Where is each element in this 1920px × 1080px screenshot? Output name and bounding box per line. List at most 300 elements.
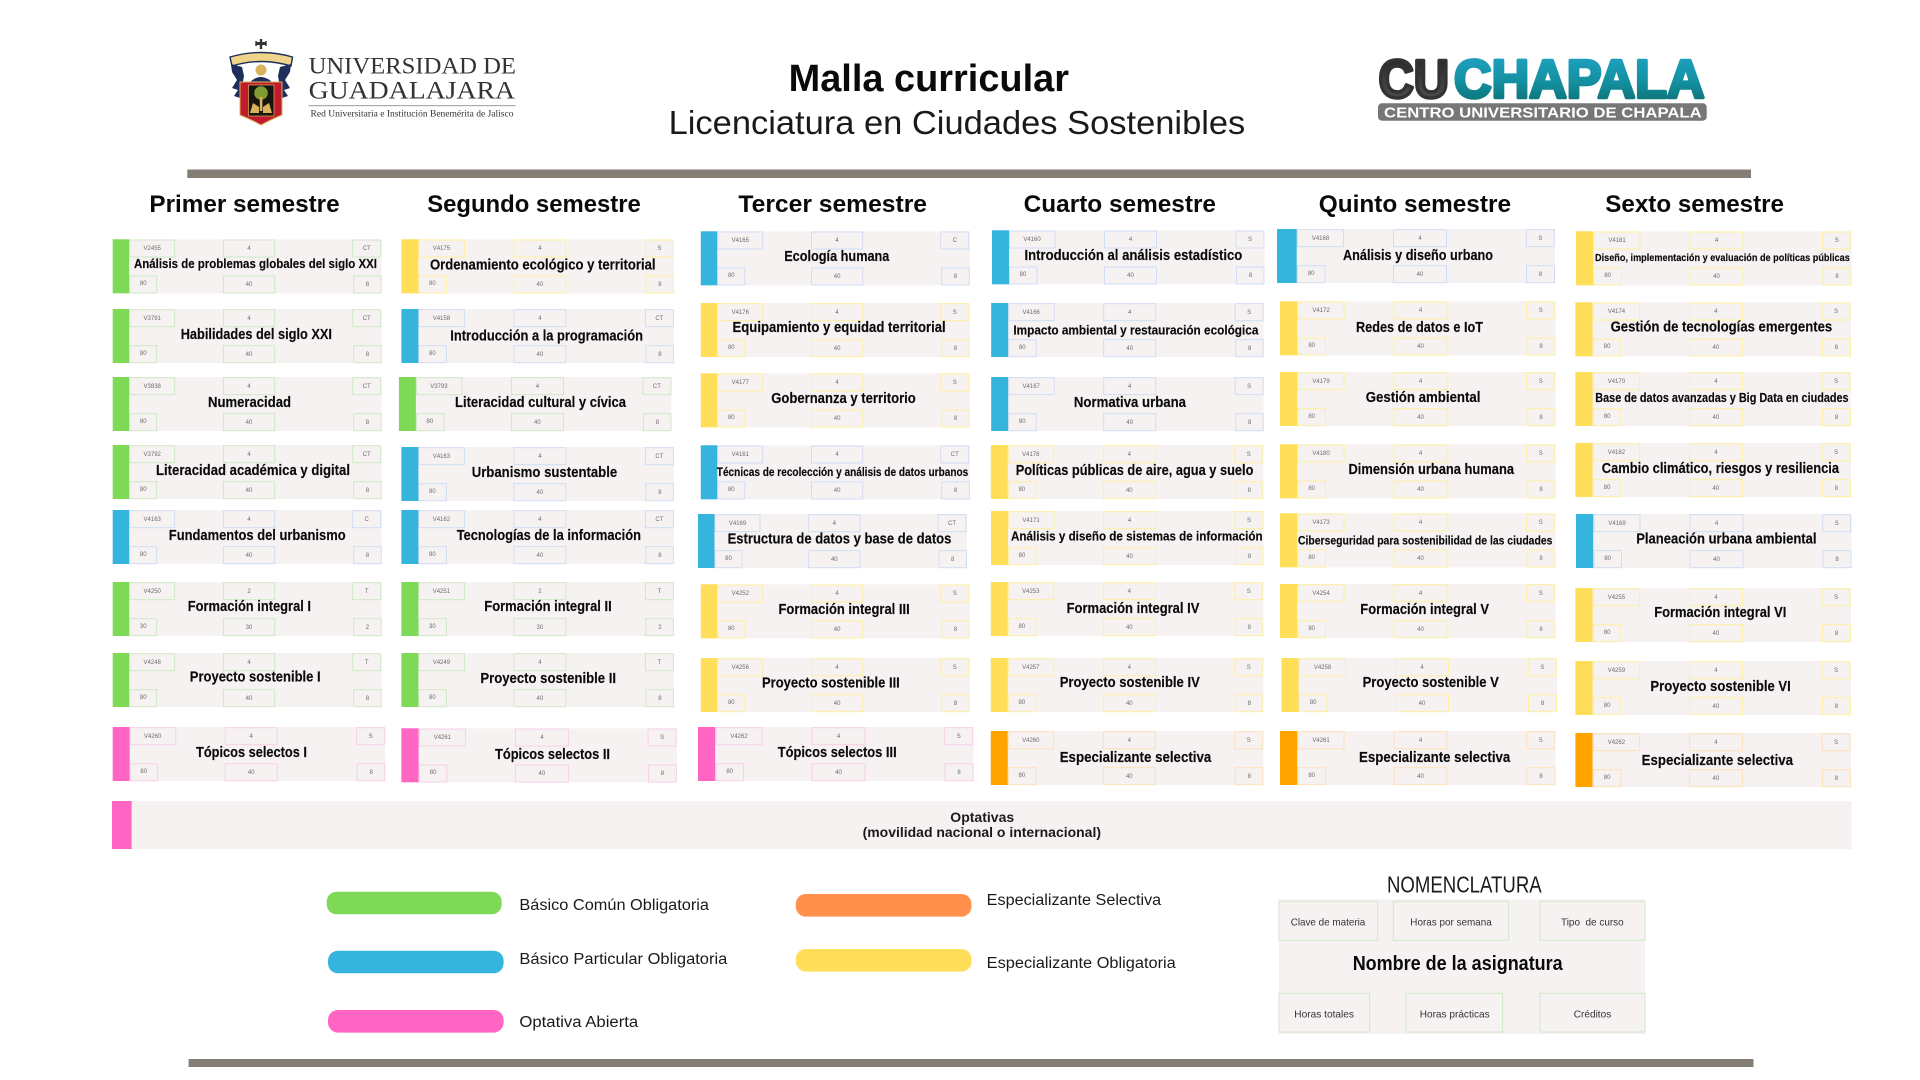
card: Numeracidad: [113, 377, 382, 431]
card: Ciberseguridad para sostenibilidad de las ciudades: 4: [1419, 520, 1423, 526]
card: Tópicos selectos I: 8: [370, 770, 374, 776]
panel: Cuarto semestre courses: [991, 230, 1264, 785]
card: Numeracidad: 40: [246, 420, 253, 426]
card: Formación integral II: 30: [429, 624, 436, 630]
card: Tópicos selectos III: [698, 727, 974, 781]
card: Políticas públicas de aire, agua y suelo: 4: [1128, 452, 1132, 458]
panel: Tercer semestre courses: [698, 231, 974, 781]
card: Técnicas de recolección y análisis de datos urbanos: V4161: [732, 452, 750, 458]
card: Proyecto sostenible I: 40: [246, 696, 253, 702]
card: Proyecto sostenible I: 4: [247, 660, 251, 666]
card: Literacidad cultural y cívica: CT: [653, 384, 661, 390]
card: Habilidades del siglo XXI: [113, 309, 382, 363]
icon: university coat of arms: [230, 39, 292, 125]
card: Fundamentos del urbanismo: 80: [140, 552, 147, 558]
card: Diseño, implementación y evaluación de políticas públicas: Diseño, implementación y evaluación de políticas públicas: [1595, 252, 1850, 264]
card: Numeracidad: 4: [247, 384, 251, 390]
card: Proyecto sostenible II: 8: [658, 696, 662, 702]
card: Diseño, implementación y evaluación de políticas públicas: 80: [1604, 273, 1612, 279]
card: Tópicos selectos I: 4: [250, 734, 254, 740]
panel: nomenclature key: Horas por semana: [1410, 916, 1492, 928]
card: Proyecto sostenible II: 40: [537, 696, 544, 702]
card: Estructura de datos y base de datos: 4: [833, 521, 837, 527]
card: Proyecto sostenible VI: S: [1834, 668, 1838, 674]
card: Tecnologías de la información: [401, 510, 674, 564]
card: Tópicos selectos II: 40: [539, 771, 546, 777]
panel: Quinto semestre courses: [1277, 229, 1557, 785]
card: Tópicos selectos II: [401, 728, 677, 782]
card: Políticas públicas de aire, agua y suelo: Políticas públicas de aire, agua y suelo: [1016, 463, 1254, 479]
card: Proyecto sostenible II: Proyecto sostenible II: [480, 671, 616, 687]
card: Formación integral I: 30: [246, 625, 253, 631]
card: Dimensión urbana humana: 80: [1308, 486, 1316, 492]
card: Formación integral II: Formación integral II: [484, 599, 612, 615]
panel: nomenclature key: Tipo de curso: [1561, 916, 1624, 928]
card: Habilidades del siglo XXI: 8: [366, 352, 370, 358]
card: Formación integral I: Formación integral I: [188, 599, 311, 615]
card: Proyecto sostenible IV: S: [1247, 665, 1251, 671]
card: Gestión de tecnologías emergentes: 8: [1835, 345, 1839, 351]
card: Urbanismo sustentable: 4: [538, 454, 542, 460]
card: Formación integral II: [401, 582, 674, 636]
card: Normativa urbana: 8: [1248, 420, 1252, 426]
card: Redes de datos e IoT: 40: [1417, 344, 1424, 350]
card: Formación integral I: 30: [140, 624, 147, 630]
card: Tecnologías de la información: Tecnologías de la información: [457, 528, 641, 544]
card: Urbanismo sustentable: 80: [429, 489, 436, 495]
card: Cambio climático, riesgos y resiliencia: 80: [1604, 485, 1611, 491]
card: Redes de datos e IoT: 4: [1419, 308, 1423, 314]
card: Gobernanza y territorio: 80: [728, 415, 735, 421]
card: Literacidad académica y digital: [113, 445, 382, 499]
panel: Segundo semestre courses: [399, 239, 677, 782]
card: Formación integral V: 40: [1417, 627, 1424, 633]
legend item: Especializante Selectiva: [796, 892, 1162, 917]
card: Proyecto sostenible II: [401, 653, 674, 707]
card: Tópicos selectos III: 4: [837, 734, 841, 740]
card: Introducción a la programación: 40: [537, 352, 544, 358]
card: Análisis y diseño de sistemas de información: 4: [1128, 518, 1132, 524]
card: Impacto ambiental y restauración ecológica: V4166: [1023, 310, 1041, 316]
card: Redes de datos e IoT: Redes de datos e IoT: [1356, 320, 1483, 336]
card: Gestión de tecnologías emergentes: V4174: [1608, 309, 1626, 315]
card: Proyecto sostenible I: T: [365, 660, 369, 666]
card: Especializante selectiva: [1280, 731, 1556, 785]
card: Tópicos selectos III: 8: [957, 770, 961, 776]
card: Especializante selectiva: S: [1539, 738, 1543, 744]
card: Base de datos avanzadas y Big Data en ciudades: 4: [1714, 379, 1718, 385]
card: Proyecto sostenible II: 4: [538, 660, 542, 666]
card: Ciberseguridad para sostenibilidad de las ciudades: [1280, 513, 1556, 567]
card: Especializante selectiva: V4262: [1608, 740, 1626, 746]
card: Especializante selectiva: V4261: [1312, 738, 1330, 744]
card: Análisis de problemas globales del siglo XXI: 80: [140, 281, 147, 287]
card: Impacto ambiental y restauración ecológica: 40: [1126, 346, 1134, 352]
card: Especializante selectiva: 80: [1308, 773, 1316, 779]
card: Literacidad académica y digital: 40: [246, 488, 253, 494]
card: Especializante selectiva: 8: [1539, 774, 1543, 780]
title: Malla curricular: [789, 58, 1069, 100]
card: Formación integral IV: S: [1247, 589, 1251, 595]
card: Formación integral V: 80: [1308, 626, 1316, 632]
logo wordmark: Red Universitaria e Institución Benemérita de Jalisco: [310, 110, 514, 120]
card: Tópicos selectos III: 40: [835, 770, 842, 776]
card: Proyecto sostenible III: 40: [834, 701, 841, 707]
card: Técnicas de recolección y análisis de datos urbanos: 80: [728, 487, 735, 493]
card: Introducción al análisis estadístico: Introducción al análisis estadístico: [1024, 248, 1242, 264]
card: Políticas públicas de aire, agua y suelo: 80: [1018, 487, 1026, 493]
card: Proyecto sostenible III: 4: [835, 665, 839, 671]
card: Impacto ambiental y restauración ecológica: S: [1247, 310, 1251, 316]
card: Equipamiento y equidad territorial: 8: [954, 346, 958, 352]
legend item: Especializante Obligatoria: [796, 949, 1176, 972]
card: Habilidades del siglo XXI: Habilidades del siglo XXI: [181, 327, 332, 343]
card: Tópicos selectos I: 40: [248, 770, 255, 776]
card: Gestión ambiental: 4: [1419, 379, 1423, 385]
card: Especializante selectiva: 8: [1248, 774, 1252, 780]
card: Literacidad académica y digital: V3792: [144, 452, 162, 458]
card: Redes de datos e IoT: 8: [1539, 344, 1543, 350]
card: Gestión de tecnologías emergentes: 80: [1604, 344, 1611, 350]
card: Ordenamiento ecológico y territorial: 8: [658, 282, 662, 288]
card: Gestión ambiental: 8: [1539, 415, 1543, 421]
card: Planeación urbana ambiental: Planeación urbana ambiental: [1636, 531, 1816, 547]
panel: Optativas band: [112, 801, 1852, 849]
card: Equipamiento y equidad territorial: [701, 303, 970, 357]
card: Formación integral VI: [1575, 588, 1851, 642]
card: Tópicos selectos III: V4262: [730, 734, 748, 740]
card: Literacidad cultural y cívica: 40: [534, 420, 541, 426]
card: Equipamiento y equidad territorial: 80: [728, 345, 735, 351]
card: Redes de datos e IoT: [1280, 301, 1556, 355]
card: Formación integral II: V4251: [433, 589, 451, 595]
card: Formación integral II: 30: [537, 625, 544, 631]
card: Tópicos selectos I: V4260: [144, 734, 162, 740]
card: Introducción al análisis estadístico: 80: [1020, 272, 1027, 278]
card: Planeación urbana ambiental: 80: [1604, 556, 1612, 562]
card: Introducción al análisis estadístico: S: [1248, 237, 1252, 243]
card: Tecnologías de la información: V4162: [433, 517, 451, 523]
card: Proyecto sostenible I: 8: [366, 696, 370, 702]
card: Ecología humana: V4165: [732, 238, 750, 244]
card: Ciberseguridad para sostenibilidad de las ciudades: 8: [1539, 556, 1543, 562]
card: Cambio climático, riesgos y resiliencia: S: [1834, 450, 1838, 456]
card: Equipamiento y equidad territorial: V4176: [732, 310, 750, 316]
card: Estructura de datos y base de datos: [698, 514, 967, 568]
card: Urbanismo sustentable: Urbanismo sustentable: [472, 465, 617, 481]
legend item: Optativa Abierta: Optativa Abierta: [519, 1014, 639, 1031]
heading: Nomenclatura: NOMENCLATURA: [1387, 872, 1542, 898]
card: Análisis y diseño urbano: S: [1538, 236, 1542, 242]
card: Proyecto sostenible I: [113, 653, 382, 707]
card: Tópicos selectos II: S: [660, 735, 664, 741]
logo: CUChapala: [1378, 50, 1707, 122]
card: Formación integral V: V4254: [1312, 591, 1330, 597]
card: Formación integral IV: 80: [1018, 624, 1026, 630]
logo wordmark: [309, 53, 516, 120]
card: Proyecto sostenible V: Proyecto sostenible V: [1363, 675, 1499, 691]
card: Diseño, implementación y evaluación de políticas públicas: [1576, 231, 1852, 285]
panel: nomenclature key: Nombre de la asignatura: [1353, 953, 1563, 975]
card: Planeación urbana ambiental: 40: [1713, 557, 1720, 563]
card: Técnicas de recolección y análisis de datos urbanos: 4: [835, 452, 839, 458]
card: Proyecto sostenible VI: 80: [1604, 703, 1611, 709]
card: Ordenamiento ecológico y territorial: S: [657, 246, 661, 252]
card: Dimensión urbana humana: S: [1539, 451, 1543, 457]
card: Ciberseguridad para sostenibilidad de las ciudades: Ciberseguridad para sostenibilidad de las ciudades: [1298, 534, 1553, 548]
logo: CUChapala: CENTRO UNIVERSITARIO DE CHAPALA: [1384, 105, 1702, 122]
card: Formación integral VI: 80: [1604, 630, 1611, 636]
card: Análisis de problemas globales del siglo XXI: V2455: [144, 246, 162, 252]
card: Impacto ambiental y restauración ecológica: [991, 303, 1264, 357]
card: Técnicas de recolección y análisis de datos urbanos: CT: [951, 452, 959, 458]
card: Diseño, implementación y evaluación de políticas públicas: S: [1835, 238, 1839, 244]
card: Formación integral VI: Formación integral VI: [1654, 605, 1786, 621]
card: Técnicas de recolección y análisis de datos urbanos: 40: [834, 488, 841, 494]
card: Equipamiento y equidad territorial: 4: [835, 310, 839, 316]
card: Proyecto sostenible I: 80: [140, 695, 147, 701]
card: Ordenamiento ecológico y territorial: 40: [537, 282, 544, 288]
card: Especializante selectiva: V4260: [1022, 738, 1040, 744]
card: Literacidad cultural y cívica: 80: [427, 419, 434, 425]
heading: Segundo semestre: Segundo semestre: [427, 191, 641, 218]
card: Diseño, implementación y evaluación de políticas públicas: 4: [1715, 238, 1719, 244]
card: Literacidad académica y digital: CT: [363, 452, 371, 458]
panel: nomenclature key: Horas totales: [1294, 1008, 1354, 1020]
card: Urbanismo sustentable: 40: [537, 490, 544, 496]
card: Ciberseguridad para sostenibilidad de las ciudades: 40: [1417, 556, 1424, 562]
card: Introducción al análisis estadístico: 8: [1249, 273, 1253, 279]
panel: Optativas band: (movilidad nacional o internacional): [863, 824, 1101, 840]
card: Especializante selectiva: 40: [1126, 774, 1133, 780]
card: Formación integral IV: 4: [1128, 589, 1132, 595]
card: Proyecto sostenible V: 80: [1310, 700, 1317, 706]
heading: Sexto semestre: Sexto semestre: [1605, 191, 1784, 218]
logo: CUChapala: CU: [1378, 50, 1449, 110]
card: Técnicas de recolección y análisis de datos urbanos: Técnicas de recolección y análisis de datos urbanos: [717, 467, 968, 479]
card: Análisis y diseño de sistemas de información: Análisis y diseño de sistemas de información: [1011, 529, 1263, 543]
card: Tópicos selectos I: S: [369, 734, 373, 740]
card: Gestión ambiental: Gestión ambiental: [1366, 390, 1480, 406]
card: Fundamentos del urbanismo: C: [365, 517, 370, 523]
card: Gestión de tecnologías emergentes: [1575, 302, 1851, 356]
panel: nomenclature key: Horas prácticas: [1420, 1008, 1490, 1020]
card: Análisis y diseño urbano: 80: [1308, 271, 1315, 277]
card: Formación integral III: V4252: [732, 591, 750, 597]
card: Introducción a la programación: 4: [538, 316, 542, 322]
card: Urbanismo sustentable: V4163: [433, 454, 451, 460]
card: Proyecto sostenible VI: V4259: [1608, 668, 1626, 674]
card: Ecología humana: 80: [728, 273, 735, 279]
card: Normativa urbana: S: [1247, 384, 1251, 390]
card: Políticas públicas de aire, agua y suelo: [991, 445, 1263, 499]
card: Tecnologías de la información: 4: [538, 517, 542, 523]
card: Dimensión urbana humana: V4180: [1312, 451, 1330, 457]
card: Fundamentos del urbanismo: 4: [247, 517, 251, 523]
card: Proyecto sostenible V: V4258: [1314, 665, 1332, 671]
card: Especializante selectiva: 8: [1835, 776, 1839, 782]
card: Estructura de datos y base de datos: V4169: [729, 521, 747, 527]
card: Proyecto sostenible III: V4256: [732, 665, 750, 671]
card: Gestión de tecnologías emergentes: 40: [1713, 345, 1720, 351]
card: Análisis y diseño urbano: 4: [1418, 236, 1422, 242]
card: Normativa urbana: 4: [1128, 384, 1132, 390]
card: Fundamentos del urbanismo: 8: [366, 553, 370, 559]
card: Estructura de datos y base de datos: CT: [948, 521, 956, 527]
card: Estructura de datos y base de datos: 8: [951, 557, 955, 563]
card: Habilidades del siglo XXI: 80: [140, 351, 147, 357]
card: Técnicas de recolección y análisis de datos urbanos: 8: [954, 488, 958, 494]
card: Numeracidad: 8: [366, 420, 370, 426]
card: Introducción a la programación: [401, 309, 674, 363]
card: Tópicos selectos II: 8: [661, 771, 665, 777]
card: Tecnologías de la información: 40: [537, 553, 544, 559]
card: Formación integral IV: V4253: [1022, 589, 1040, 595]
card: Redes de datos e IoT: S: [1539, 308, 1543, 314]
card: Formación integral I: V4250: [144, 589, 162, 595]
card: Equipamiento y equidad territorial: S: [953, 310, 957, 316]
card: Cambio climático, riesgos y resiliencia: V4182: [1608, 450, 1626, 456]
card: Formación integral VI: 8: [1835, 631, 1839, 637]
card: Numeracidad: Numeracidad: [208, 395, 291, 411]
card: Proyecto sostenible IV: V4257: [1022, 665, 1040, 671]
card: Ecología humana: 4: [835, 238, 839, 244]
card: Análisis y diseño urbano: [1277, 229, 1555, 283]
card: Gobernanza y territorio: 4: [835, 380, 839, 386]
card: Proyecto sostenible IV: 4: [1128, 665, 1132, 671]
card: Base de datos avanzadas y Big Data en ciudades: [1575, 372, 1851, 426]
card: Tópicos selectos I: 80: [140, 769, 148, 775]
card: Proyecto sostenible III: S: [953, 665, 957, 671]
card: Base de datos avanzadas y Big Data en ciudades: S: [1834, 379, 1838, 385]
card: Formación integral III: 8: [954, 627, 958, 633]
card: Normativa urbana: Normativa urbana: [1074, 395, 1187, 411]
card: Dimensión urbana humana: 40: [1417, 487, 1424, 493]
card: Análisis y diseño de sistemas de información: V4171: [1022, 518, 1040, 524]
legend item: Optativa Abierta: [328, 1010, 639, 1033]
card: Habilidades del siglo XXI: 40: [246, 352, 253, 358]
card: Especializante selectiva: 80: [1018, 773, 1026, 779]
card: Especializante selectiva: [991, 731, 1263, 785]
card: Introducción a la programación: 80: [429, 351, 436, 357]
card: Formación integral VI: 40: [1713, 631, 1720, 637]
card: Redes de datos e IoT: V4172: [1312, 308, 1330, 314]
card: Proyecto sostenible III: [701, 658, 970, 712]
card: Análisis de problemas globales del siglo XXI: [113, 239, 382, 293]
card: Base de datos avanzadas y Big Data en ciudades: 8: [1835, 415, 1839, 421]
card: Análisis y diseño de sistemas de información: 80: [1019, 553, 1026, 559]
card: Proyecto sostenible IV: 8: [1248, 701, 1252, 707]
card: Dimensión urbana humana: [1280, 444, 1556, 498]
card: Formación integral IV: Formación integral IV: [1067, 601, 1200, 617]
card: Tópicos selectos I: [113, 727, 385, 781]
card: Numeracidad: 80: [140, 419, 147, 425]
card: Tópicos selectos II: V4261: [434, 735, 452, 741]
card: Planeación urbana ambiental: V4169: [1608, 521, 1626, 527]
card: Planeación urbana ambiental: S: [1835, 521, 1839, 527]
card: Análisis de problemas globales del siglo XXI: Análisis de problemas globales del siglo XXI: [134, 256, 377, 271]
card: Introducción a la programación: V4158: [433, 316, 451, 322]
card: Especializante selectiva: 4: [1714, 740, 1718, 746]
card: Proyecto sostenible III: 80: [728, 700, 735, 706]
card: Urbanismo sustentable: 8: [658, 490, 662, 496]
logo wordmark: GUADALAJARA: [309, 78, 515, 105]
card: Normativa urbana: [991, 377, 1264, 431]
card: Especializante selectiva: 80: [1604, 775, 1611, 781]
card: Formación integral III: 80: [728, 626, 735, 632]
card: Planeación urbana ambiental: 8: [1835, 557, 1839, 563]
legend item: Básico Particular Obligatoria: Básico Particular Obligatoria: [519, 951, 728, 968]
card: Gestión ambiental: S: [1539, 379, 1543, 385]
card: Base de datos avanzadas y Big Data en ciudades: V4170: [1608, 379, 1626, 385]
card: Gobernanza y territorio: 40: [834, 416, 841, 422]
card: Cambio climático, riesgos y resiliencia: 4: [1714, 450, 1718, 456]
card: Introducción al análisis estadístico: 4: [1129, 237, 1133, 243]
card: Análisis y diseño de sistemas de información: S: [1247, 518, 1251, 524]
card: Tecnologías de la información: 80: [429, 552, 436, 558]
card: Formación integral II: T: [658, 589, 662, 595]
card: Proyecto sostenible IV: 40: [1126, 701, 1133, 707]
card: Ciberseguridad para sostenibilidad de las ciudades: S: [1539, 520, 1543, 526]
card: Tópicos selectos I: Tópicos selectos I: [196, 745, 307, 761]
card: Base de datos avanzadas y Big Data en ciudades: Base de datos avanzadas y Big Data en ciudades: [1595, 391, 1849, 405]
card: Ordenamiento ecológico y territorial: 4: [538, 246, 542, 252]
card: Formación integral III: S: [953, 591, 957, 597]
card: Literacidad cultural y cívica: [399, 377, 671, 431]
card: Análisis de problemas globales del siglo XXI: 8: [366, 282, 370, 288]
card: Tópicos selectos III: 80: [726, 769, 734, 775]
card: Proyecto sostenible III: 8: [954, 701, 958, 707]
card: Formación integral V: 8: [1539, 627, 1543, 633]
card: Redes de datos e IoT: 80: [1308, 343, 1316, 349]
card: Impacto ambiental y restauración ecológica: 4: [1128, 310, 1132, 316]
heading: Tercer semestre: Tercer semestre: [738, 191, 927, 218]
card: Cambio climático, riesgos y resiliencia: 8: [1835, 486, 1839, 492]
card: Literacidad cultural y cívica: Literacidad cultural y cívica: [455, 395, 627, 411]
card: Habilidades del siglo XXI: V3791: [144, 316, 162, 322]
panel: Optativas band: Optativas: [950, 809, 1014, 825]
card: Gobernanza y territorio: V4177: [732, 380, 750, 386]
card: Habilidades del siglo XXI: CT: [363, 316, 371, 322]
card: Proyecto sostenible II: V4249: [433, 660, 451, 666]
card: Gestión ambiental: 80: [1308, 414, 1316, 420]
card: Normativa urbana: 40: [1126, 420, 1134, 426]
card: Proyecto sostenible II: T: [658, 660, 662, 666]
card: Análisis y diseño urbano: 40: [1417, 272, 1424, 278]
card: Formación integral I: [113, 582, 382, 636]
heading: Quinto semestre: Quinto semestre: [1319, 191, 1511, 218]
legend item: Especializante Selectiva: Especializante Selectiva: [987, 892, 1162, 909]
heading: Cuarto semestre: Cuarto semestre: [1024, 191, 1216, 218]
card: Especializante selectiva: 40: [1417, 774, 1424, 780]
card: Análisis y diseño de sistemas de información: 40: [1126, 554, 1133, 560]
card: Literacidad cultural y cívica: 8: [656, 420, 660, 426]
card: Formación integral V: S: [1539, 591, 1543, 597]
card: Fundamentos del urbanismo: Fundamentos del urbanismo: [169, 528, 346, 544]
card: Proyecto sostenible I: V4248: [144, 660, 162, 666]
card: Formación integral V: 4: [1419, 591, 1423, 597]
card: Proyecto sostenible V: [1282, 658, 1557, 712]
card: Proyecto sostenible IV: 80: [1018, 700, 1026, 706]
card: Ecología humana: 40: [834, 274, 841, 280]
card: Especializante selectiva: Especializante selectiva: [1359, 750, 1511, 766]
legend item: Básico Común Obligatoria: [327, 892, 709, 914]
card: Equipamiento y equidad territorial: Equipamiento y equidad territorial: [732, 320, 946, 336]
card: Gestión ambiental: 40: [1417, 415, 1424, 421]
card: Gestión de tecnologías emergentes: 4: [1714, 309, 1718, 315]
card: Formación integral V: Formación integral V: [1360, 602, 1489, 618]
card: Políticas públicas de aire, agua y suelo: V4178: [1022, 452, 1040, 458]
